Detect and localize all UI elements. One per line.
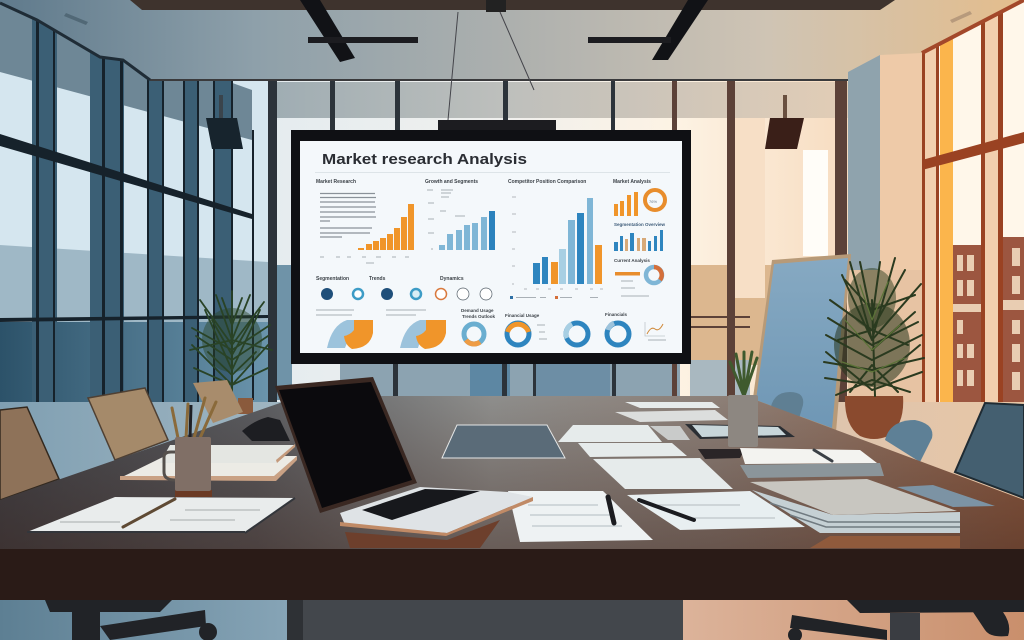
papers front center [508,491,805,542]
paper stack right [698,448,884,478]
notebook left front [27,497,295,533]
speaker right [765,95,804,149]
potted plant right [824,258,924,439]
papers back right [558,402,733,489]
panel: central bar chart [508,179,603,299]
panel: pie charts and donuts: Demand Usage [461,308,494,313]
under table [0,600,1024,640]
panel: right side charts [613,179,666,296]
small plant in cylinder [728,352,758,447]
right column wall [848,50,924,420]
panel: right side charts: Market Analysis [613,179,651,185]
left window wall [0,0,268,462]
folder stack front right [750,479,960,533]
left chairs [0,380,243,500]
panel: pie charts and donuts: Financials [605,312,628,317]
back chairs [770,392,1024,498]
center mat on table [442,425,565,458]
potted plant left [190,291,272,414]
panel: market overview [316,179,414,263]
back window wall [150,78,850,403]
table front edge [0,549,1024,600]
panel: central bar chart: Competitor Position Comparison [508,179,586,185]
panel: pie charts and donuts: Trends Outlook [462,314,496,319]
table reflections [175,490,960,548]
panel: right side charts: Current Analysis [614,258,650,263]
pens [608,497,694,523]
notebooks left back [120,444,297,481]
panel: segmentation icons [316,276,492,300]
screen title: Market research Analysis [322,151,527,168]
mug with pencils [164,398,216,491]
whiteboard [752,254,851,432]
display screen [291,120,691,364]
speaker left [206,95,243,149]
panel: market overview: Market Research [316,179,356,185]
panel: right side charts: 76% [649,199,657,204]
right window wall [922,0,1024,420]
panel: segmentation icons: Segmentation [316,276,349,282]
conference table top [0,396,1024,550]
panel: segmentation icons: Trends [369,276,386,282]
desk phone [242,417,290,441]
laptop [275,377,533,536]
panel: pie charts and donuts: Financial Usage [505,313,540,318]
tablet on table [685,424,795,439]
chair base right [788,600,1024,640]
ceiling [0,0,1024,120]
paper doc blue [897,485,995,507]
floor [0,402,1024,552]
panel: bar chart blue [425,179,495,250]
panel: pie charts and donuts [316,308,666,349]
chair base left [45,600,217,640]
panel: segmentation icons: Dynamics [440,276,464,282]
panel: bar chart blue: Growth and Segments [425,179,478,185]
panel: right side charts: Segmentation Overview [614,222,666,227]
